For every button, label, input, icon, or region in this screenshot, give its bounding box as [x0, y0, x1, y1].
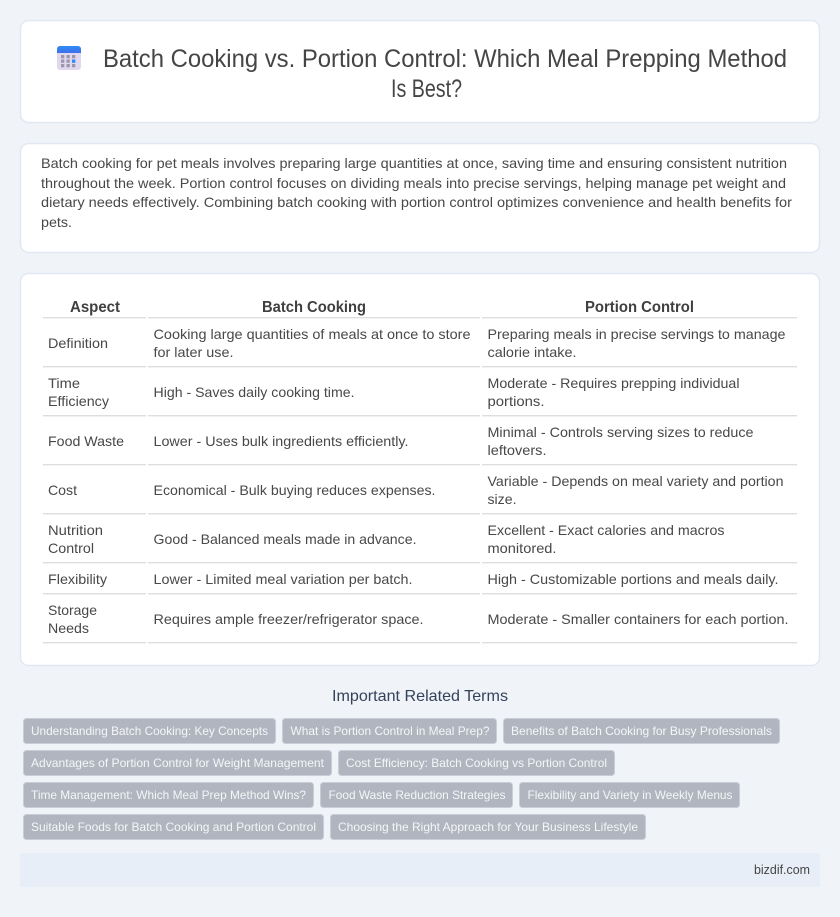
table row: definition: Definition — [48, 335, 108, 351]
panel: comparison table — [20, 274, 820, 666]
table header row: Aspect — [70, 299, 121, 316]
table row: flexibility — [48, 571, 778, 587]
table row: storage needs: Storage — [48, 602, 97, 618]
table row: definition: for later use. — [154, 344, 234, 360]
chip: choosing the right approach — [330, 814, 646, 840]
chip: cost efficiency: Cost Efficiency: Batch Cooking vs Portion Control — [346, 756, 607, 770]
chip: what is portion control — [282, 718, 496, 744]
chip: time management: Time Management: Which Meal Prep Method Wins? — [31, 788, 306, 802]
table header row: Batch Cooking — [262, 299, 366, 316]
text block: summary paragraph: pets. — [41, 214, 72, 230]
table row: cost: Economical - Bulk buying reduces expenses. — [154, 482, 436, 498]
text block: summary paragraph: Batch cooking for pet meals involves preparing large quantities at once, saving time and ensuring consistent nutrition — [41, 155, 787, 171]
chip: time management — [24, 782, 314, 808]
related term chips — [24, 718, 780, 840]
table row: time efficiency: Time — [48, 375, 80, 391]
table row: cost — [48, 473, 784, 507]
table row: flexibility: High - Customizable portions and meals daily. — [488, 571, 778, 587]
chip: benefits of batch cooking — [504, 718, 780, 744]
table row: storage needs: Requires ample freezer/refrigerator space. — [154, 611, 424, 627]
table row: storage needs — [48, 602, 788, 636]
table row: definition: Preparing meals in precise servings to manage — [488, 326, 786, 342]
table row: food waste — [48, 424, 754, 458]
chip: suitable foods — [24, 814, 324, 840]
chip: suitable foods: Suitable Foods for Batch Cooking and Portion Control — [31, 820, 316, 834]
chip: what is portion control: What is Portion Control in Meal Prep? — [290, 724, 490, 738]
table row: food waste: leftovers. — [488, 442, 546, 458]
table row: definition: calorie intake. — [488, 344, 576, 360]
footer source text: bizdif.com — [754, 862, 810, 877]
table row: storage needs: Needs — [48, 620, 89, 636]
table row: nutrition control: monitored. — [488, 540, 556, 556]
chip: food waste reduction — [320, 782, 512, 808]
table row: cost: size. — [488, 491, 516, 507]
table row: nutrition control — [48, 522, 724, 556]
table row: nutrition control: Nutrition — [48, 522, 103, 538]
chip: advantages of portion control: Advantages of Portion Control for Weight Management — [31, 756, 325, 770]
table row: time efficiency: High - Saves daily cooking time. — [154, 384, 354, 400]
title: Batch Cooking vs. Portion Control: Which Meal Prepping Method — [103, 45, 787, 73]
table header row — [70, 299, 694, 316]
table row: definition: Cooking large quantities of meals at once to store — [154, 326, 471, 342]
table row: cost: Variable - Depends on meal variety and portion — [488, 473, 784, 489]
table row: cost: Cost — [48, 482, 77, 498]
panel: title header — [20, 20, 820, 122]
table header row: Portion Control — [585, 299, 694, 316]
chip: flexibility and variety: Flexibility and Variety in Weekly Menus — [528, 788, 732, 802]
text block: summary paragraph: throughout the week. Portion control focuses on dividing meals into precise servings, helping manage pet weight and — [41, 175, 786, 191]
footer bar — [20, 853, 820, 887]
heading: important related terms: Important Related Terms — [332, 688, 508, 705]
table row: time efficiency: Moderate - Requires prepping individual — [488, 375, 740, 391]
table row: storage needs: Moderate - Smaller containers for each portion. — [488, 611, 788, 627]
chip: flexibility and variety — [520, 782, 740, 808]
table row: nutrition control: Good - Balanced meals made in advance. — [154, 531, 416, 547]
chip: food waste reduction: Food Waste Reduction Strategies — [328, 788, 506, 802]
table row: flexibility: Flexibility — [48, 571, 107, 587]
chip: benefits of batch cooking: Benefits of Batch Cooking for Busy Professionals — [511, 724, 772, 738]
title: Is Best? — [391, 75, 462, 103]
icon: calendar — [57, 46, 81, 70]
chip: choosing the right approach: Choosing the Right Approach for Your Business Lifestyle — [338, 820, 638, 834]
text block: summary paragraph: dietary needs effectively. Combining batch cooking with portion control optimizes convenience and health benefits for — [41, 194, 792, 210]
table row: time efficiency: portions. — [488, 393, 544, 409]
table row: flexibility: Lower - Limited meal variation per batch. — [154, 571, 412, 587]
chip: understanding batch cooking — [24, 718, 276, 744]
chip: understanding batch cooking: Understanding Batch Cooking: Key Concepts — [31, 724, 268, 738]
table row: food waste: Food Waste — [48, 433, 124, 449]
title — [103, 45, 787, 103]
chip: advantages of portion control — [24, 750, 332, 776]
table row: time efficiency — [48, 375, 740, 409]
table row: nutrition control: Control — [48, 540, 94, 556]
table row: food waste: Minimal - Controls serving sizes to reduce — [488, 424, 754, 440]
text block: summary paragraph — [41, 155, 792, 230]
table row: nutrition control: Excellent - Exact calories and macros — [488, 522, 724, 538]
table row: definition — [48, 326, 786, 360]
table row: time efficiency: Efficiency — [48, 393, 109, 409]
panel: introduction text — [20, 144, 820, 252]
chip: cost efficiency — [338, 750, 614, 776]
table row: food waste: Lower - Uses bulk ingredients efficiently. — [154, 433, 408, 449]
